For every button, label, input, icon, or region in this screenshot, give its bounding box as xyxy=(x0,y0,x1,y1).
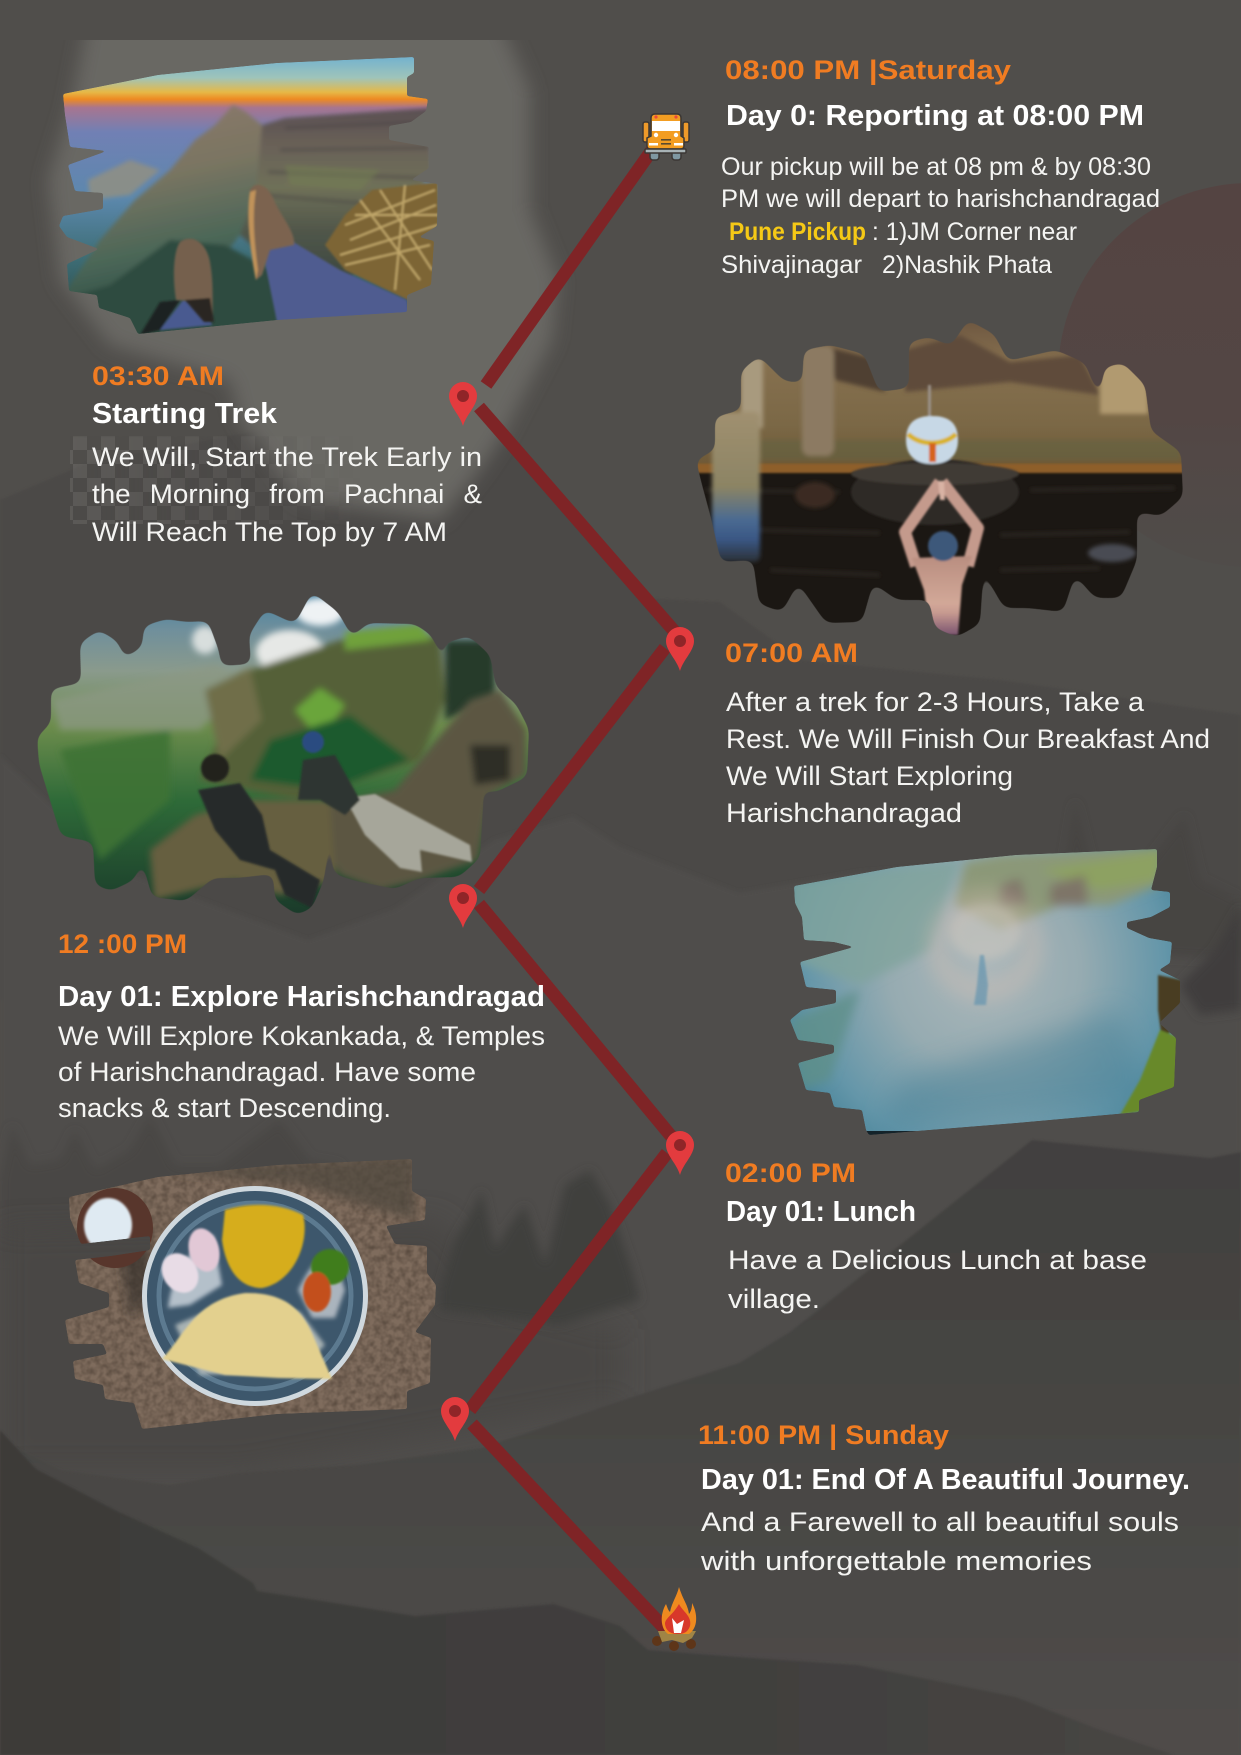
heading: Day 01: Lunch xyxy=(726,1196,916,1228)
body text: the Morning from Pachnai & xyxy=(92,479,482,509)
body text: village. xyxy=(728,1284,820,1314)
body text: We Will Explore Kokankada, & Temples xyxy=(58,1021,545,1051)
cliff vegetation xyxy=(1120,975,1182,1115)
steel plate xyxy=(142,1186,368,1406)
icon: map pin 2 xyxy=(666,627,694,671)
body text xyxy=(728,1245,1147,1314)
trekker in dark jacket xyxy=(198,754,320,908)
route line xyxy=(470,150,675,1632)
time label: 07:00 AM xyxy=(725,638,858,668)
trekker in camouflage trousers xyxy=(298,731,472,872)
time label: 02:00 PM xyxy=(725,1158,856,1188)
onion slices xyxy=(160,1226,221,1294)
heading: Day 01: End Of A Beautiful Journey. xyxy=(701,1464,1190,1496)
body text: 2)Nashik Phata xyxy=(882,251,1052,279)
time label: 08:00 PM |Saturday xyxy=(725,55,1011,85)
body text: : 1)JM Corner near xyxy=(872,218,1077,246)
time label: 12 :00 PM xyxy=(58,929,187,959)
folded chapati xyxy=(162,1293,332,1379)
icon: campfire xyxy=(652,1587,696,1651)
time label: 03:30 AM xyxy=(92,361,224,391)
body text: Harishchandragad xyxy=(726,798,962,828)
time label: 11:00 PM | Sunday xyxy=(698,1420,949,1450)
body text: We Will, Start the Trek Early in xyxy=(92,442,482,472)
icon: map pin 3 xyxy=(449,884,477,928)
panel: 03:30 AM starting trek text xyxy=(92,361,482,547)
panel: 07:00 AM text xyxy=(725,638,1210,828)
body text: And a Farewell to all beautiful souls xyxy=(701,1507,1179,1537)
body text: snacks & start Descending. xyxy=(58,1093,391,1123)
rock ledge xyxy=(150,690,526,900)
body text xyxy=(92,442,482,547)
body text: of Harishchandragad. Have some xyxy=(58,1057,476,1087)
body text: Our pickup will be at 08 pm & by 08:30 xyxy=(721,153,1151,181)
body text: After a trek for 2-3 Hours, Take a xyxy=(726,687,1144,717)
dry grass tuft xyxy=(325,182,440,300)
icon: map pin 1 xyxy=(449,382,477,426)
body text: Will Reach The Top by 7 AM xyxy=(92,517,447,547)
heading: Day 01: Explore Harishchandragad xyxy=(58,981,545,1013)
icon: orange bus xyxy=(643,114,689,160)
icon: map pin 4 xyxy=(666,1131,694,1175)
body text: Have a Delicious Lunch at base xyxy=(728,1245,1147,1275)
panel: 11:00 PM farewell text xyxy=(698,1420,1190,1576)
trouser legs xyxy=(140,240,410,335)
photo: trekkers at Kokankada cliff xyxy=(35,590,530,915)
heading: Starting Trek xyxy=(92,398,278,430)
body text: Rest. We Will Finish Our Breakfast And xyxy=(726,724,1210,754)
panel: 12:00 PM explore text xyxy=(58,929,545,1123)
body text xyxy=(58,1021,545,1123)
body text: with unforgettable memories xyxy=(700,1546,1092,1576)
chutneys xyxy=(303,1249,349,1312)
body text xyxy=(700,1507,1179,1576)
devotee with raised hands xyxy=(905,481,978,635)
photo: temple pool with shivling xyxy=(690,318,1190,638)
body text: PM we will depart to harishchandragad xyxy=(721,185,1160,213)
body text: Shivajinagar xyxy=(721,251,862,279)
boots xyxy=(174,185,294,322)
panel: 08:00 PM reporting text xyxy=(721,55,1160,279)
photo: feet over the cliff at sunrise xyxy=(55,55,445,340)
clay cup of buttermilk xyxy=(77,1188,153,1268)
body text xyxy=(726,687,1210,828)
body text: We Will Start Exploring xyxy=(726,761,1013,791)
panel: 02:00 PM lunch text xyxy=(725,1158,1147,1314)
photo: thali lunch plate xyxy=(50,1155,440,1435)
body text xyxy=(721,153,1160,279)
heading: Day 0: Reporting at 08:00 PM xyxy=(726,100,1144,132)
icon: map pin 5 xyxy=(441,1397,469,1441)
shivling with cloth and garland xyxy=(851,385,1019,525)
fog cloud behind first photo xyxy=(48,10,558,524)
photo: cloud shadow and rainbow halo xyxy=(785,845,1185,1140)
body text: Pune Pickup xyxy=(729,218,866,246)
